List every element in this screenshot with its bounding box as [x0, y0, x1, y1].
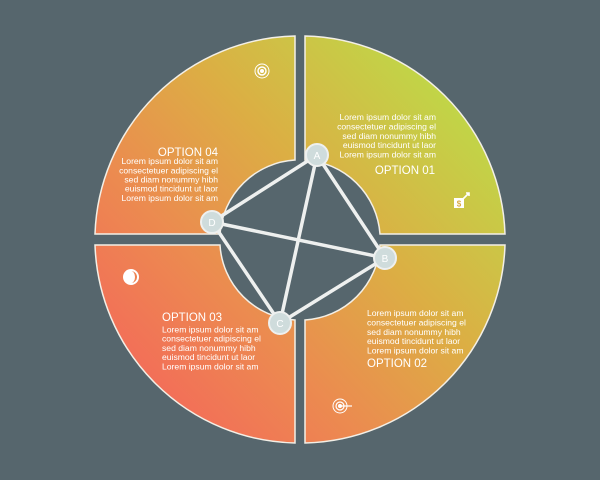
text: option 01 body: sed diam nonummy hibh — [342, 131, 436, 141]
text: option 04 body: consectetuer adipiscing el — [119, 166, 218, 176]
text: option 03 body — [162, 324, 261, 372]
panel: option 02 — [305, 245, 505, 443]
node D: D — [208, 218, 216, 229]
text: option 04 body: Lorem ipsum dolor sit am — [122, 193, 218, 203]
text: option 01 body: Lorem ipsum dolor sit am — [340, 150, 436, 160]
node A: A — [314, 151, 321, 162]
text: option 02 body — [367, 308, 466, 356]
node B — [374, 247, 396, 269]
text: option 04 body: Lorem ipsum dolor sit am — [122, 156, 218, 166]
text: option 01 body: consectetuer adipiscing el — [337, 122, 436, 132]
network diagram — [201, 144, 396, 334]
text: option 02 body: Lorem ipsum dolor sit am — [367, 308, 463, 318]
icon: concentric target — [255, 64, 269, 78]
node B: B — [382, 254, 389, 265]
text: option 01 body — [337, 112, 436, 160]
heading: option 02: OPTION 02 — [367, 358, 427, 370]
node C: C — [276, 319, 284, 330]
panel: option 01 — [305, 36, 505, 234]
text: option 04 body: euismod tincidunt ut laor — [125, 184, 218, 194]
icon: dollar: $ — [457, 200, 462, 208]
panel: option 03 — [95, 245, 295, 443]
text: option 03 body: euismod tincidunt ut laor — [162, 352, 255, 362]
text: option 04 body — [119, 156, 218, 203]
text: option 01 body: Lorem ipsum dolor sit am — [340, 112, 436, 122]
text: option 03 body: sed diam nonummy hibh — [162, 343, 256, 353]
node A — [306, 144, 328, 166]
icon: dollar — [454, 193, 469, 208]
node D — [201, 211, 223, 233]
text: option 03 body: Lorem ipsum dolor sit am — [162, 324, 258, 334]
text: option 02 body: Lorem ipsum dolor sit am — [367, 346, 463, 356]
text: option 02 body: euismod tincidunt ut laor — [367, 336, 460, 346]
text: option 04 body: sed diam nonummy hibh — [124, 174, 218, 184]
icon: pie circle — [123, 269, 139, 285]
heading: option 01: OPTION 01 — [375, 165, 435, 177]
heading: option 03: OPTION 03 — [162, 312, 222, 324]
text: option 02 body: consectetuer adipiscing el — [367, 318, 466, 328]
text: option 01 body: euismod tincidunt ut laor — [343, 140, 436, 150]
heading: option 04: OPTION 04 — [158, 147, 219, 159]
text: option 03 body: consectetuer adipiscing el — [162, 334, 261, 344]
node C — [269, 312, 291, 334]
panel: option 04 — [95, 36, 295, 234]
icon: target — [333, 399, 352, 413]
text: option 02 body: sed diam nonummy hibh — [367, 327, 461, 337]
text: option 03 body: Lorem ipsum dolor sit am — [162, 362, 258, 372]
